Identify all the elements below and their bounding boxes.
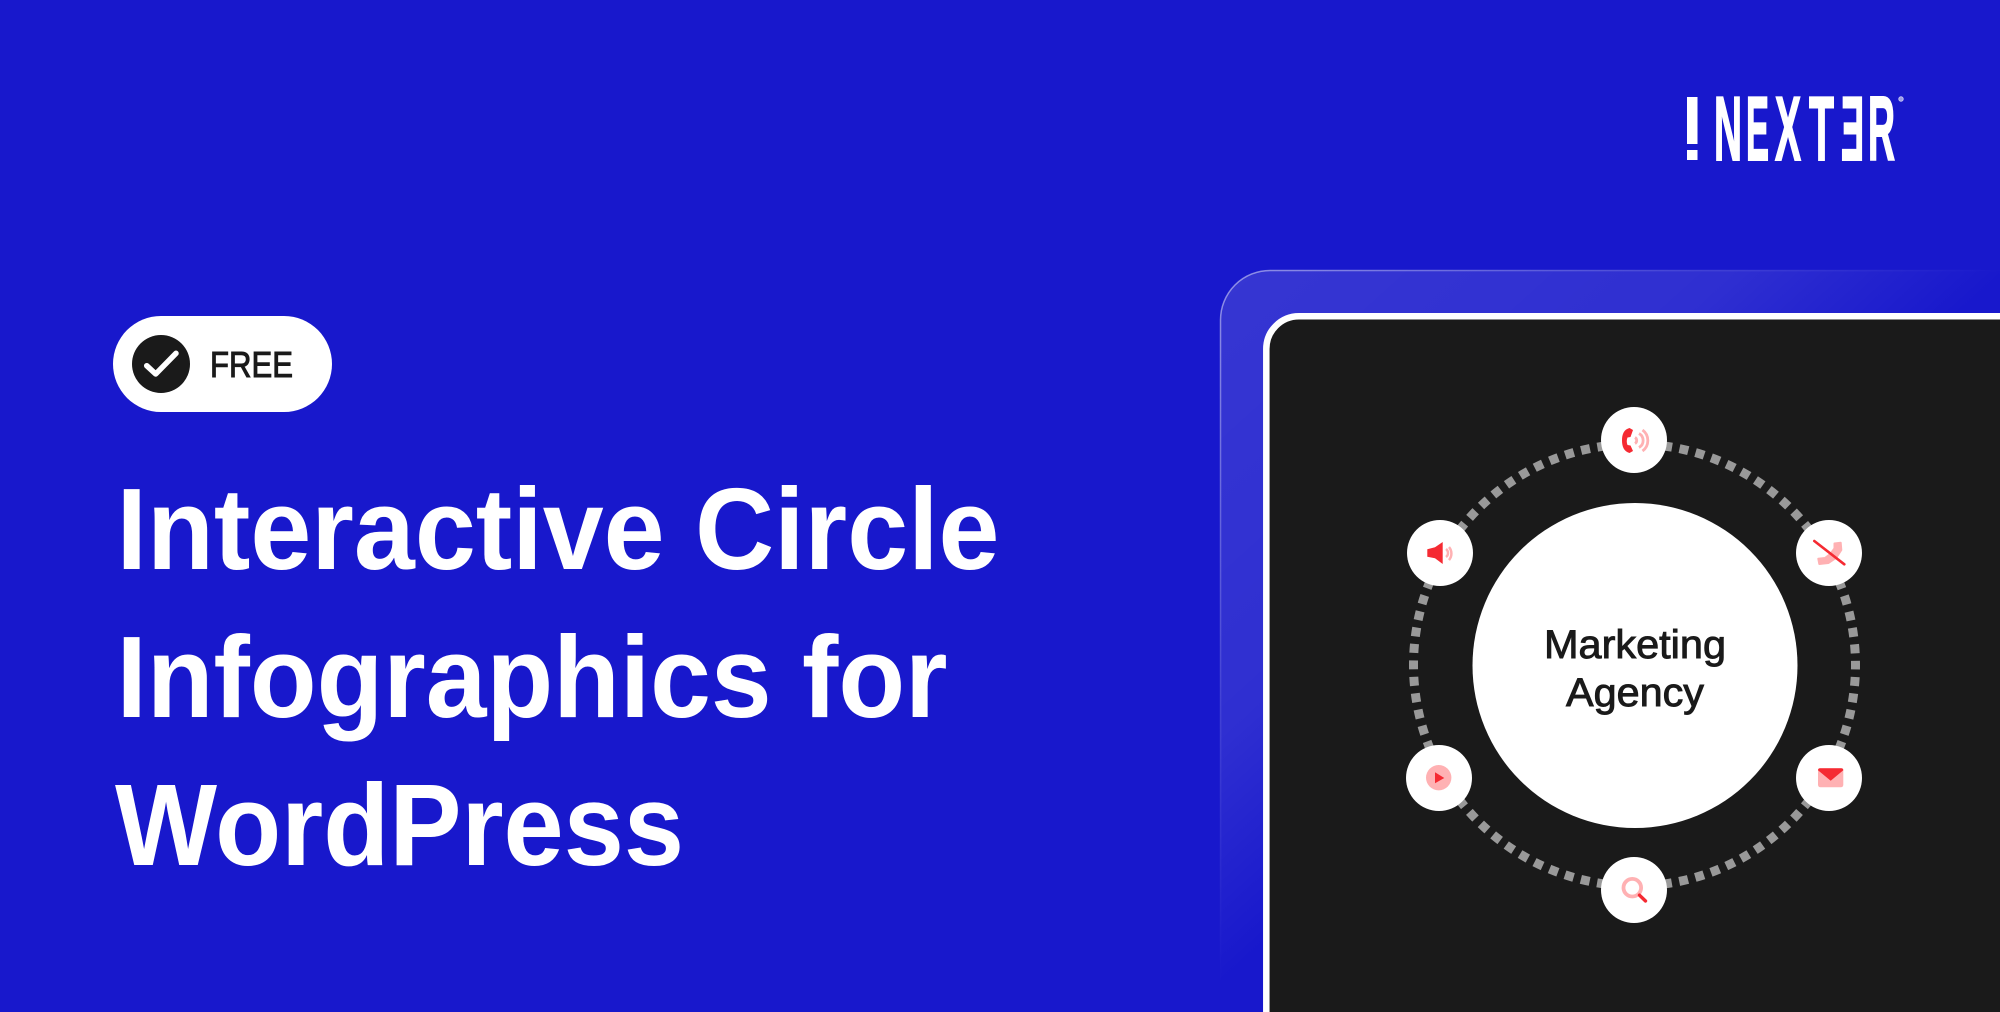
logo wordmark: X	[1775, 79, 1801, 180]
icon: phone with slash	[1814, 541, 1844, 564]
node: advertising	[1407, 520, 1473, 586]
central circle: Marketing Agency	[1472, 503, 1798, 828]
icon: envelope	[1818, 768, 1843, 787]
icon: check mark	[132, 335, 190, 393]
logo wordmark: E	[1746, 79, 1769, 180]
logo wordmark: N	[1714, 79, 1742, 180]
central label: Agency	[1566, 671, 1704, 715]
node: search	[1601, 857, 1667, 923]
title: Interactive Circle	[116, 464, 1000, 594]
logo wordmark	[1714, 79, 1895, 180]
logo exclamation mark	[1687, 97, 1698, 160]
logo wordmark: E	[1841, 79, 1864, 180]
badge label: FREE	[210, 344, 293, 385]
logo: Nexter	[1687, 79, 1903, 180]
node: video	[1406, 745, 1472, 811]
title: WordPress	[115, 760, 684, 890]
logo: Nexter: R	[1868, 79, 1895, 180]
dotted ring	[1414, 444, 1856, 886]
icon: phone handset with sound waves	[1622, 428, 1648, 453]
node: phone call	[1601, 407, 1667, 473]
title	[115, 464, 1000, 890]
title: Infographics for	[116, 612, 948, 742]
central label: Marketing	[1544, 623, 1726, 667]
panel: translucent backing card	[1220, 270, 2000, 1012]
logo wordmark: T	[1809, 79, 1834, 180]
badge pill	[113, 316, 332, 412]
icon: magnifier	[1624, 879, 1646, 901]
central label	[1544, 623, 1726, 715]
node: email	[1796, 745, 1862, 811]
badge: FREE	[113, 316, 332, 412]
icon: megaphone speaker	[1427, 542, 1451, 564]
icon: play button	[1426, 765, 1451, 790]
logo registered mark	[1899, 97, 1903, 101]
panel: dark preview card	[1266, 316, 2000, 1012]
node: blocked call	[1796, 520, 1862, 586]
